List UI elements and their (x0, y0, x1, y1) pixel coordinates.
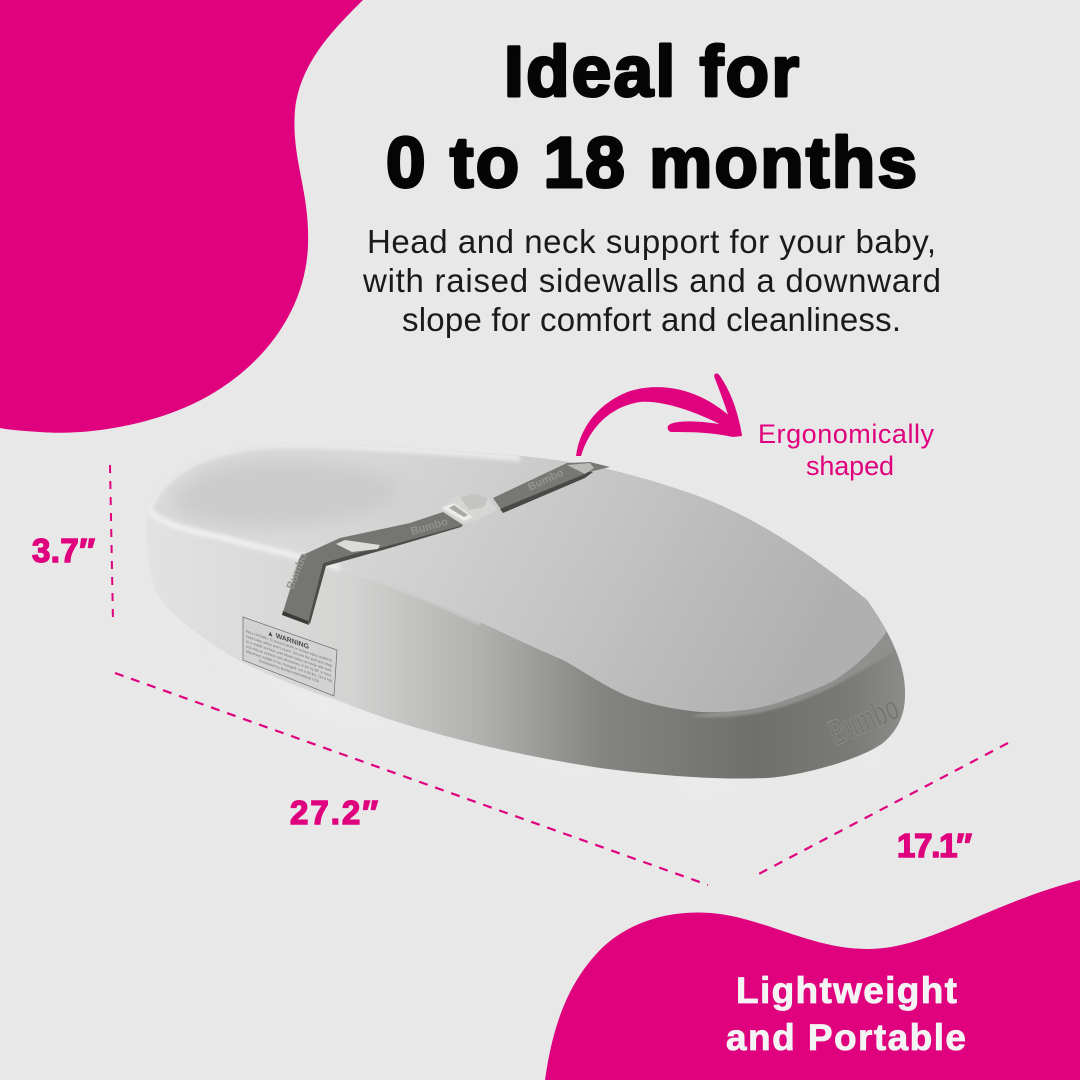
warning label: FALL HAZARD: To prevent death or serious injury, ALWAYS (246, 629, 332, 663)
height value: 3.7″ (32, 532, 95, 569)
description text: slope for comfort and cleanliness. (402, 301, 901, 338)
warning label: ▲ WARNING (267, 628, 309, 651)
strap clips (336, 463, 594, 552)
heading: Ideal for (504, 33, 799, 112)
bottom-right pink blob with caption (545, 880, 1080, 1080)
heading (386, 33, 917, 203)
front edge highlight (384, 582, 480, 625)
rim highlight (149, 510, 340, 568)
caption: lightweight and portable: Lightweight (736, 970, 957, 1011)
strap branding: Bumbo (410, 516, 450, 538)
pad top surface (356, 452, 886, 712)
upper rim highlight (148, 445, 520, 512)
strap branding: Bumbo (285, 551, 310, 591)
warning label: Distributed by Bumbo International USA (259, 659, 319, 684)
warning label: keep baby within arm's reach. Secure the pad and strap (246, 634, 332, 668)
lip on foot of pad (694, 615, 896, 718)
strap branding (285, 467, 566, 591)
pad side wall (147, 443, 905, 779)
dimension: length (115, 673, 708, 885)
strap branding: Bumbo (526, 467, 566, 494)
warning label: Maximum weight to be changed: not a 30 lbs. (13.6 kg) (246, 649, 332, 683)
top-left pink blob (0, 0, 363, 433)
description text: Head and neck support for your baby, (367, 223, 936, 260)
warning label: to a stable surface and attach baby securely with belt. (246, 639, 332, 673)
heading: 0 to 18 months (386, 124, 917, 203)
dimension: height (32, 465, 113, 622)
pad shadow (200, 640, 885, 795)
embossed logo: Bumbo (823, 687, 905, 753)
length value: 27.2″ (290, 794, 378, 831)
caption: lightweight and portable (726, 970, 966, 1058)
description text (362, 223, 941, 338)
warning label: Use only on surfaces with dimensions of 19" by 28" or more. (246, 644, 332, 678)
curved arrow (576, 373, 742, 456)
callout: ergonomically shaped (758, 419, 934, 481)
dimension: width (753, 743, 1008, 877)
changing pad product (154, 445, 906, 778)
warning label (243, 617, 337, 696)
strap (282, 462, 610, 625)
width value: 17.1″ (897, 827, 972, 864)
description text: with raised sidewalls and a downward (362, 262, 941, 299)
callout: ergonomically shaped: Ergonomically (758, 419, 934, 449)
buckle (440, 494, 497, 524)
callout: ergonomically shaped: shaped (806, 451, 894, 481)
caption: lightweight and portable: and Portable (726, 1017, 966, 1058)
pad shading clipped to silhouette (147, 420, 910, 717)
seat well shading (178, 461, 387, 527)
